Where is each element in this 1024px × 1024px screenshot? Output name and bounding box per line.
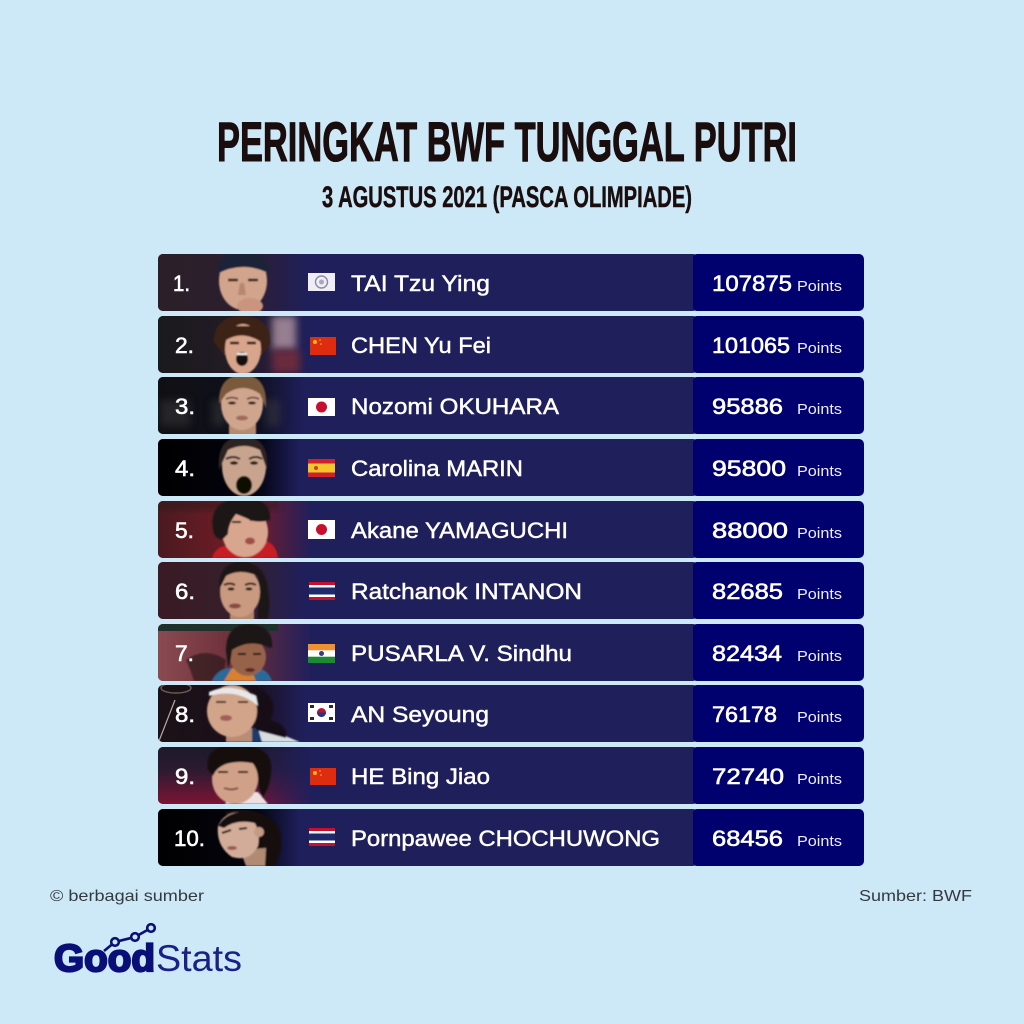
name: Carolina MARIN [351, 456, 523, 481]
photo credit: © berbagai sumber [50, 888, 205, 905]
points panel [693, 254, 864, 311]
ranking row 10 [158, 809, 864, 866]
points panel [693, 377, 864, 434]
flag: Thailand [309, 828, 335, 846]
points label: Points [797, 648, 842, 665]
name: Akane YAMAGUCHI [351, 518, 568, 543]
photo: Pornpawee CHOCHUWONG [158, 809, 303, 866]
ranking row 8 [158, 683, 864, 742]
rank: 5. [175, 518, 194, 543]
source note: Sumber: BWF [859, 888, 972, 905]
name: HE Bing Jiao [351, 764, 490, 789]
photo: HE Bing Jiao [158, 745, 313, 804]
rank: 8. [175, 702, 195, 727]
rank: 6. [175, 579, 195, 604]
photo: CHEN Yu Fei [158, 316, 313, 374]
flag: Thailand [309, 582, 335, 600]
photo: Nozomi OKUHARA [158, 377, 298, 434]
row bar [158, 809, 698, 866]
row bar [158, 501, 698, 558]
row bar [158, 316, 698, 373]
flag: China [310, 337, 336, 355]
row bar [158, 254, 698, 311]
rank: 1. [173, 271, 190, 296]
points value: 95800 [712, 456, 786, 481]
points value: 82434 [712, 641, 782, 666]
logo mark: trend line [104, 924, 155, 951]
logo wordmark: Good: Good [54, 938, 155, 980]
row bar [158, 624, 698, 681]
points label: Points [797, 401, 842, 418]
points value: 88000 [712, 518, 788, 543]
rank: 9. [175, 764, 195, 789]
points panel [693, 316, 864, 373]
flag: Chinese Taipei [308, 273, 335, 291]
points label: Points [797, 278, 842, 295]
points panel [693, 562, 864, 619]
name: TAI Tzu Ying [351, 271, 490, 296]
ranking row 3 [158, 375, 864, 435]
flag: India [308, 644, 335, 663]
points label: Points [797, 833, 842, 850]
row bar [158, 685, 698, 742]
ranking row 4 [158, 436, 864, 496]
photo: PUSARLA V. Sindhu [158, 624, 313, 681]
flag: Japan [308, 520, 335, 539]
points panel [693, 439, 864, 496]
points panel [693, 747, 864, 804]
points label: Points [797, 340, 842, 357]
points value: 82685 [712, 579, 783, 604]
flag: South Korea [308, 703, 335, 722]
flag: China [310, 768, 336, 785]
points value: 95886 [712, 394, 783, 419]
points panel [693, 685, 864, 742]
photo: Ratchanok INTANON [158, 562, 295, 619]
name: PUSARLA V. Sindhu [351, 641, 572, 666]
rank: 3. [175, 394, 195, 419]
ranking row 5 [158, 498, 864, 558]
subtitle: 3 AGUSTUS 2021 (PASCA OLIMPIADE) [322, 181, 692, 214]
points panel [693, 624, 864, 681]
ranking row 6 [158, 561, 864, 620]
points value: 76178 [712, 702, 777, 727]
photo: Akane YAMAGUCHI [158, 498, 313, 558]
flag: Japan [308, 398, 335, 416]
points value: 107875 [712, 271, 792, 296]
ranking row 9 [158, 745, 864, 804]
rank: 2. [175, 333, 194, 358]
points panel [693, 501, 864, 558]
points label: Points [797, 525, 842, 542]
ranking row 1 [158, 254, 864, 311]
rank: 4. [175, 456, 195, 481]
points label: Points [797, 771, 842, 788]
row bar [158, 562, 698, 619]
logo wordmark: Stats: Stats [156, 938, 242, 979]
name: Nozomi OKUHARA [351, 394, 559, 419]
ranking row 2 [158, 316, 864, 374]
flag: Spain [308, 459, 335, 477]
name: AN Seyoung [351, 702, 489, 727]
ranking row 7 [158, 624, 864, 681]
points value: 101065 [712, 333, 790, 358]
points value: 72740 [712, 764, 784, 789]
points label: Points [797, 586, 842, 603]
points label: Points [797, 463, 842, 480]
rank: 7. [175, 641, 194, 666]
name: Pornpawee CHOCHUWONG [351, 826, 660, 851]
rank: 10. [174, 826, 205, 851]
photo: TAI Tzu Ying [158, 254, 298, 311]
row bar [158, 747, 698, 804]
name: CHEN Yu Fei [351, 333, 491, 358]
points label: Points [797, 709, 842, 726]
row bar [158, 439, 698, 496]
photo: AN Seyoung [158, 683, 308, 742]
points panel [693, 809, 864, 866]
row bar [158, 377, 698, 434]
GoodStats logo [54, 924, 242, 980]
name: Ratchanok INTANON [351, 579, 582, 604]
photo: Carolina MARIN [158, 436, 303, 496]
points value: 68456 [712, 826, 783, 851]
